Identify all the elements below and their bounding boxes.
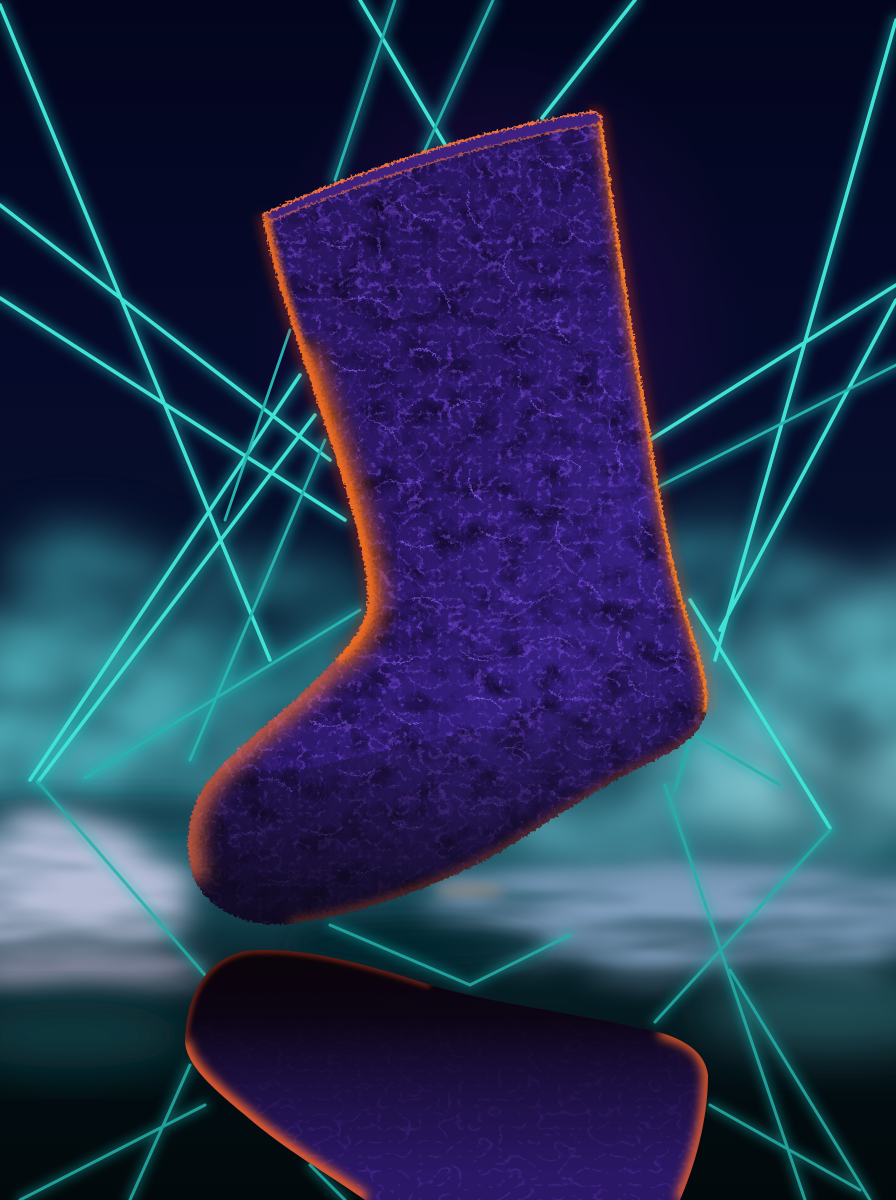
haze dark band — [0, 797, 330, 833]
reflection orange rim left — [183, 1040, 365, 1200]
boot felt body — [170, 100, 720, 940]
haze teal right low — [700, 970, 896, 1050]
bottom warm edge — [290, 712, 706, 924]
reflection red rim top — [185, 950, 430, 1040]
line core layer — [0, 0, 896, 828]
orange glow on toe top — [188, 660, 335, 880]
boot lower shading — [186, 694, 702, 926]
fog: left bank — [0, 550, 380, 820]
haze teal left low — [0, 1003, 190, 1067]
boot base colour — [170, 100, 720, 940]
neon lines: upper scene — [0, 0, 896, 828]
boot fibres coarse — [187, 122, 702, 925]
orange rim left shaft — [262, 215, 368, 660]
reflection top darkening — [185, 950, 708, 1162]
cuff lip highlight — [268, 124, 602, 222]
haze warm glint — [435, 882, 505, 898]
floor: dark reflective surface — [0, 880, 896, 1200]
purple halo behind boot — [250, 40, 750, 620]
boot rim glow — [262, 112, 707, 712]
reflection orange rim right — [660, 1032, 708, 1200]
neon lines: floor reflections — [20, 735, 870, 1200]
reflection core — [20, 735, 870, 1200]
haze lavender low left — [0, 940, 210, 1000]
boot loose strands — [230, 160, 684, 882]
haze blue right — [420, 860, 896, 970]
boot fibres cross — [192, 128, 704, 899]
boot dark mottling — [198, 128, 708, 903]
orange rim right shaft wide — [602, 122, 707, 712]
orange rim left shaft wide — [300, 350, 368, 660]
boot reflection — [170, 940, 720, 1200]
reflection fibres — [218, 1029, 702, 1200]
floor: horizon haze — [0, 797, 896, 1067]
haze lavender left — [0, 827, 190, 963]
boot top edge highlight — [262, 112, 602, 215]
dim line layer — [85, 0, 896, 778]
reflection glow — [20, 735, 870, 1200]
boot — [170, 100, 720, 940]
fog: right bank — [490, 525, 896, 865]
line wide glow layer — [0, 0, 896, 828]
dark floor patch — [290, 921, 550, 969]
reflection body — [170, 940, 720, 1200]
cuff opening — [262, 112, 602, 224]
orange rim right shaft — [602, 122, 707, 712]
